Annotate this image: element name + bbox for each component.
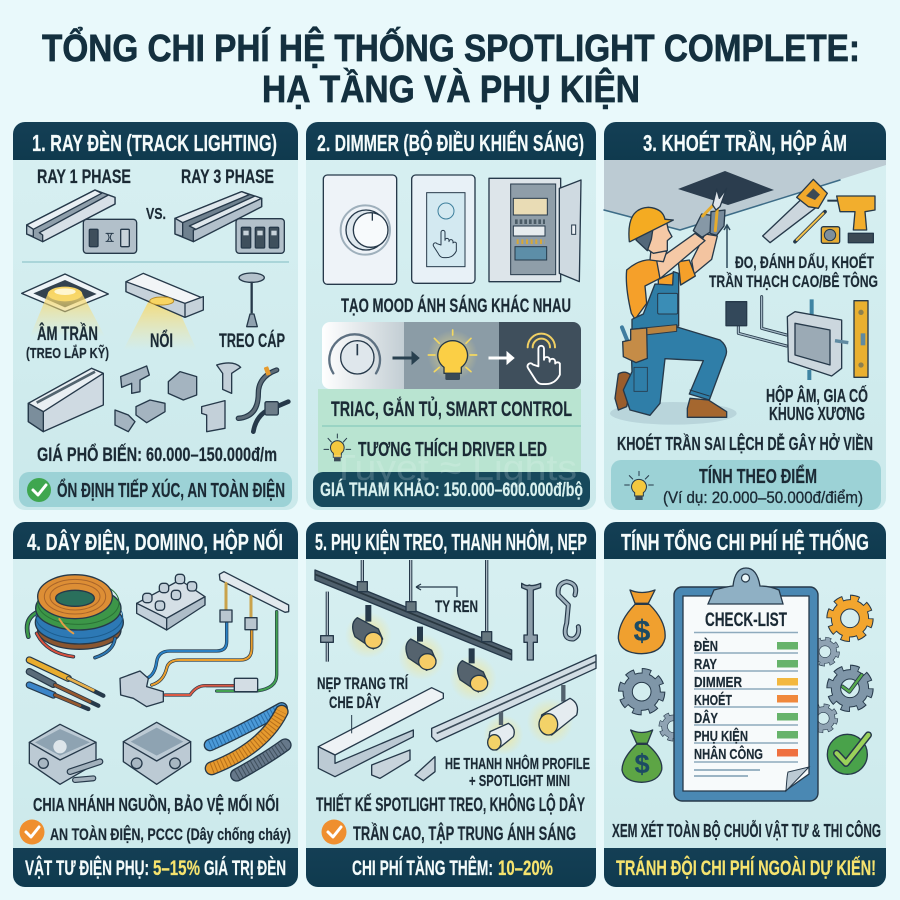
icon: clipboard checklist: ĐÈN: [694, 638, 718, 655]
icon: small bulb: [324, 434, 351, 461]
label: check-list: CHECK-LIST: [705, 610, 787, 631]
label: âm trần: ÂM TRẦN: [37, 323, 98, 345]
label: vs: VS.: [146, 206, 166, 223]
icon: ceiling: [604, 160, 886, 268]
icon: recessed light: [22, 274, 108, 337]
label: hệ thanh nhôm: [445, 754, 590, 790]
icon: junction box and level: [726, 297, 868, 380]
callout: an toàn điện: [20, 820, 291, 844]
label: hệ thanh nhôm: HE THANH NHÔM PROFILE: [445, 754, 590, 773]
heading: ray đèn: 1. RAY ĐÈN (TRACK LIGHTING): [32, 129, 277, 156]
panel: dimmer features: [318, 389, 581, 473]
icon: electrical cabinet: [489, 178, 581, 282]
panel: 3. khoét trần: [604, 122, 886, 510]
icon: clipboard checklist: DIMMER: [694, 674, 742, 691]
icon: connectors: [115, 363, 241, 432]
icon: green money bag: [622, 730, 662, 782]
icon: threaded rod: [522, 583, 541, 660]
icon: pendant light: [239, 273, 264, 327]
arrow: bulb to touch: [489, 352, 514, 364]
heading: dây điện: 4. DÂY ĐIỆN, DOMINO, HỘP NỐI: [27, 528, 283, 555]
label: ray 1 phase: RAY 1 PHASE: [37, 167, 131, 188]
icon: junction boxes: [29, 722, 191, 784]
label: nẹp trang trí: [317, 674, 409, 712]
callout: ổn định tiếp xúc: ỔN ĐỊNH TIẾP XÚC, AN TOÀN ĐIỆN: [57, 478, 285, 502]
footer: vật tư điện phụ: 5–15%: [153, 857, 200, 880]
heading: tính tổng chi phí: [604, 522, 886, 559]
icon: aluminium profile: [28, 368, 103, 432]
watermark: Tuyet ≈ Lights: [332, 447, 577, 488]
icon: clipboard checklist: [674, 568, 818, 801]
callout: an toàn điện: AN TOÀN ĐIỆN, PCCC (Dây chống cháy): [50, 825, 291, 844]
icon: gears: [622, 599, 870, 739]
icon: ray 1 phase rail: [27, 190, 115, 242]
icon: stripped wires: [29, 660, 103, 709]
label: ty ren: TY REN: [435, 597, 478, 616]
callout: tính theo điểm: [611, 460, 881, 510]
arrow: dial to bulb: [393, 352, 419, 364]
label: thiết kế: THIẾT KẾ SPOTLIGHT TREO, KHÔNG LỘ DÂY: [316, 794, 585, 816]
icon: surface light: [123, 273, 203, 350]
icon: ray 1 phase switch plate: [83, 219, 137, 253]
heading: ray đèn: [13, 122, 298, 160]
price: dimmer: [313, 472, 590, 507]
label: tạo mood: TẠO MOOD ÁNH SÁNG KHÁC NHAU: [341, 295, 571, 317]
callout: tính theo điểm: (Ví dụ: 20.000–50.000đ/điểm): [663, 488, 863, 507]
icon: clipboard checklist: PHỤ KIỆN: [694, 727, 748, 745]
footer: chi phí tăng thêm: CHI PHÍ TĂNG THÊM:: [352, 856, 493, 880]
icon: track wiring diagram: [120, 572, 289, 707]
panel: dimmer features: TRIAC, GẮN TỦ, SMART CONTROL: [331, 397, 572, 421]
label: nẹp trang trí: CHE DÂY: [329, 693, 381, 712]
icon: cover strip profile: [318, 688, 443, 781]
label: hệ thanh nhôm: + SPOTLIGHT MINI: [469, 773, 570, 790]
heading: dimmer: 2. DIMMER (BỘ ĐIỀU KHIỂN SÁNG): [317, 129, 584, 156]
title: [42, 25, 860, 111]
icon: wire coil: [27, 575, 123, 658]
footer: vật tư điện phụ: [13, 848, 298, 887]
icon: hook: [558, 582, 579, 639]
icon: worker: [610, 188, 737, 425]
icon: clipboard checklist: RAY: [694, 656, 717, 673]
label: âm trần: (TREO LẮP KỸ): [26, 344, 109, 362]
footer: chi phí tăng thêm: [306, 848, 596, 887]
icon: ray 3 phase rail: [175, 192, 262, 242]
price: dimmer: GIÁ THAM KHẢO: 150.000–600.000đ/bộ: [320, 479, 583, 501]
panel: tính tổng chi phí: [604, 522, 886, 887]
label: ray 3 phase: RAY 3 PHASE: [181, 167, 274, 188]
heading: dây điện: [13, 522, 298, 559]
footer: vật tư điện phụ: GIÁ TRỊ ĐÈN: [204, 857, 286, 880]
icon: rotary dimmer: [323, 175, 397, 284]
callout: tính theo điểm: TÍNH THEO ĐIỂM: [699, 465, 817, 488]
price: ray đèn: GIÁ PHỔ BIẾN: 60.000–150.000đ/m: [37, 444, 277, 466]
icon: tools: [763, 179, 875, 243]
icon: orange money bag: [618, 590, 665, 654]
icon: clipboard checklist: NHÂN CÔNG: [694, 745, 763, 763]
icon: dial: [329, 334, 380, 374]
icon: ray 3 phase switch plate: [236, 219, 284, 253]
icon: green check badge: [827, 734, 868, 774]
panel: 5. phụ kiện treo: [306, 522, 596, 887]
icon: power cables: [238, 366, 288, 432]
panel: 4. dây điện: [13, 522, 298, 887]
panel: mood strip: [322, 322, 581, 389]
label: hộp âm: [766, 385, 868, 424]
panel: dimmer features: TƯƠNG THÍCH DRIVER LED: [358, 438, 547, 461]
footer: chi phí tăng thêm: 10–20%: [498, 857, 553, 880]
heading: phụ kiện treo: [306, 522, 596, 559]
label: nổi: NỔI: [150, 330, 173, 352]
icon: touch dimmer: [412, 175, 475, 283]
icon: domino block: [137, 574, 205, 630]
label: đo đánh dấu: [709, 253, 878, 291]
heading: phụ kiện treo: 5. PHỤ KIỆN TREO, THANH NHÔM, NẸP: [315, 528, 587, 555]
icon: profile with mini spotlights: [432, 655, 596, 755]
label: chia nhánh: CHIA NHÁNH NGUỒN, BẢO VỆ MỐI NỐI: [33, 794, 279, 815]
panel: 2. dimmer: [306, 122, 596, 510]
heading: khoét trần: [604, 122, 886, 160]
heading: dimmer: [306, 122, 596, 160]
footer: tránh đội chi phí: [604, 848, 886, 887]
label: treo cáp: TREO CÁP: [219, 330, 285, 352]
icon: clipboard checklist: DÂY: [694, 709, 718, 727]
icon: bulb: [428, 330, 478, 380]
callout: ổn định tiếp xúc: [19, 472, 292, 507]
label: âm trần: [26, 323, 109, 362]
icon: conduit tubes: [210, 708, 285, 775]
icon: callout bulb: [625, 471, 653, 500]
callout: trần cao: TRẦN CAO, TẬP TRUNG ÁNH SÁNG: [353, 823, 576, 845]
panel: 1. ray đèn: [13, 122, 298, 510]
label: nẹp trang trí: NẸP TRANG TRÍ: [317, 674, 409, 693]
icon: touch hand: [527, 334, 560, 384]
title: HẠ TẦNG VÀ PHỤ KIỆN: [262, 67, 640, 111]
icon: orange money bag: $: [634, 615, 651, 648]
callout: trần cao: [322, 820, 576, 845]
footer: vật tư điện phụ: VẬT TƯ ĐIỆN PHỤ:: [25, 856, 149, 880]
icon: clipboard checklist: KHOÉT: [694, 692, 732, 709]
icon: green money bag: $: [634, 749, 650, 779]
icon: hanging track with spotlights: [315, 560, 512, 702]
arrow: ty ren: [416, 584, 457, 597]
